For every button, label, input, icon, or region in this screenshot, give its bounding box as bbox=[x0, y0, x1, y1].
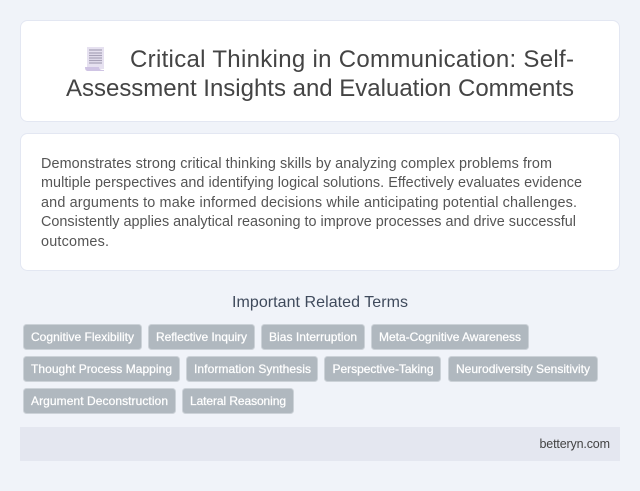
text block: description: Demonstrates strong critical thinking skills by analyzing complex problems from bbox=[41, 156, 552, 172]
tag bbox=[24, 356, 180, 382]
tag: Neurodiversity Sensitivity bbox=[456, 362, 590, 376]
title: Assessment Insights and Evaluation Comments bbox=[66, 75, 574, 102]
footer text: betteryn.com bbox=[540, 437, 610, 451]
icon: paper scroll bbox=[85, 47, 104, 71]
tag bbox=[262, 324, 364, 350]
panel: title card bbox=[20, 20, 620, 122]
tag bbox=[148, 324, 254, 350]
title: Critical Thinking in Communication: Self- bbox=[130, 46, 574, 73]
text block: description bbox=[41, 156, 582, 250]
tag: Argument Deconstruction bbox=[31, 394, 168, 408]
tag bbox=[182, 388, 294, 414]
tag: Lateral Reasoning bbox=[190, 394, 286, 408]
tag list bbox=[24, 324, 598, 414]
tag: Reflective Inquiry bbox=[156, 330, 247, 344]
text block: description: Consistently applies analytical reasoning to improve processes and drive successful bbox=[41, 214, 576, 230]
title bbox=[66, 46, 574, 102]
text block: description: and arguments to make informed decisions while anticipating potential challenges. bbox=[41, 195, 577, 211]
tag bbox=[448, 356, 598, 382]
tag bbox=[24, 388, 176, 414]
tag: Thought Process Mapping bbox=[31, 362, 172, 376]
tag: Information Synthesis bbox=[194, 362, 311, 376]
footer bar bbox=[20, 427, 620, 461]
tag: Perspective-Taking bbox=[332, 362, 434, 376]
tag: Meta-Cognitive Awareness bbox=[379, 330, 521, 344]
heading: related terms: Important Related Terms bbox=[232, 294, 408, 311]
panel: description bbox=[20, 134, 620, 270]
tag bbox=[324, 356, 440, 382]
tag bbox=[24, 324, 142, 350]
text block: description: multiple perspectives and identifying logical solutions. Effectively evaluates evidence bbox=[41, 175, 582, 191]
text block: description: outcomes. bbox=[41, 234, 109, 250]
tag: Bias Interruption bbox=[269, 330, 357, 344]
tag: Cognitive Flexibility bbox=[31, 330, 134, 344]
tag bbox=[372, 324, 528, 350]
tag bbox=[186, 356, 318, 382]
